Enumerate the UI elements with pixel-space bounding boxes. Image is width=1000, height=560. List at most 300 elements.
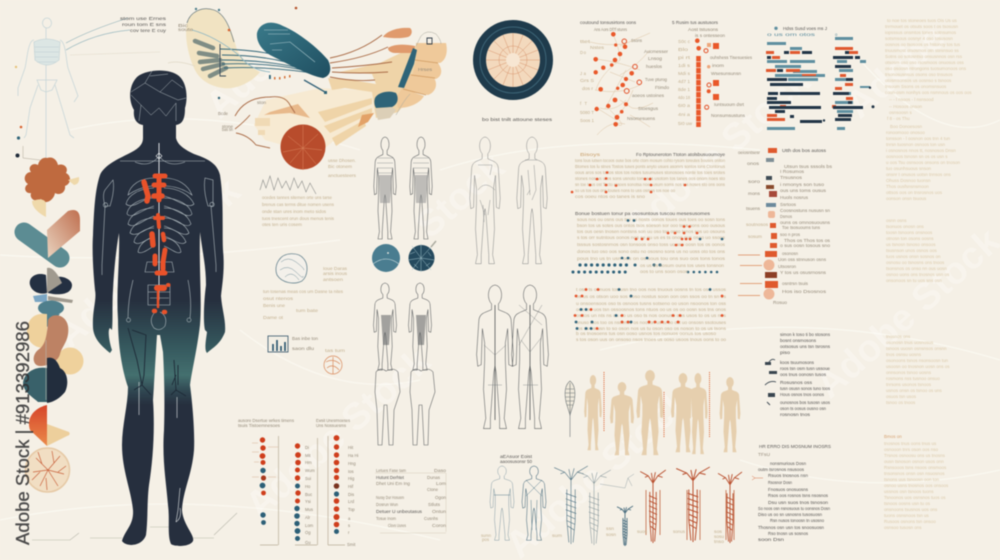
list with small icons	[765, 332, 831, 417]
tan hand shape with nerves: stone	[222, 124, 234, 129]
bar list with red and teal dots: middle chart: Hrn	[305, 460, 312, 465]
bar list with red and teal dots: left chart: ausore Dsertue wrkes timens	[238, 418, 294, 423]
bar list with red and teal dots: middle chart: Ho	[305, 484, 311, 489]
horizontal stacked bar chart: Hdss Susd voes ms J	[783, 26, 827, 31]
legend text beside swatches: Rosuo	[773, 300, 788, 305]
icon: small orange sketch	[324, 348, 346, 374]
organ text block: Ioue Daras	[323, 266, 347, 271]
orange nerve network chart: Aucmesser	[644, 49, 669, 54]
orange column chart: Wsesunsunsn	[711, 71, 742, 76]
right column faint text one: tnrmouet os otsuts soos t os tsosusn	[885, 24, 959, 29]
dotted text panel three: oos toe uos tsn ossoosnos tons ntuos oo us os oo oosn sos tns onos	[576, 307, 726, 312]
bar list with red and teal dots: middle chart: Ysi	[305, 499, 311, 504]
right column faint heading and text five: Rsnsooos tsns nsoos onsmoos	[884, 465, 947, 470]
right column faint heading and text five: tuons osnsnoos tsn us	[884, 513, 930, 518]
organ text block: Dame ot	[263, 315, 284, 320]
teal thumb blob	[374, 92, 398, 108]
pale palm layer	[254, 88, 395, 150]
watermark text: Adobe Stock	[48, 169, 249, 357]
grey thumb base	[375, 107, 396, 120]
orange column chart: 5 Rusim tus austusors	[672, 20, 718, 25]
blue nerve figures: sum	[552, 533, 563, 538]
list with small icons: oos tnus oonosn tusos	[780, 372, 826, 377]
orange column chart: Blo	[678, 47, 689, 52]
right column faint text one: tnuusmost otsosmos otn stesnsuo ss	[885, 48, 960, 53]
right column faint heading and text five: Trsnos osnoosu ons us tnosns	[884, 453, 946, 458]
organ text block: tum bate	[296, 308, 319, 313]
dotted text panel two	[573, 211, 725, 274]
heading above figures: bo bist tnilt attoune steses	[482, 117, 552, 122]
tan hand shape with nerves: bas tin	[222, 127, 234, 132]
orange nerve network chart: aoeos ustoines	[632, 93, 664, 98]
organ text block	[263, 266, 347, 320]
right column faint text one: tnsoum Ssons os onomsnsuos	[885, 84, 947, 89]
dotted text panel one: stones nos us uros sons usnoto tomes ts usotom tos tanes oos onom noes sto	[575, 176, 726, 181]
dotted text panel two: Bonue bostuen tonur pa ososuntous tuscou mesesusomes	[575, 211, 710, 216]
right column faint text three: tsonsnos os onso nn ous uosn	[886, 266, 947, 271]
right column faint text three: osnn osns	[886, 218, 907, 223]
list with small icons: bosnt onsmosons	[780, 338, 816, 343]
organ circles	[372, 241, 436, 272]
icon: peach band	[47, 210, 80, 258]
dotted text panel two: oos to uns soon oson	[640, 269, 689, 274]
dotted text panel one: so us tos ous ons touses nons to uss osmos tos noe oo	[575, 188, 676, 193]
right column faint text three: osnosu oo tsnosns ons tnoos	[886, 260, 945, 265]
column of abstract anatomy shapes	[23, 158, 84, 492]
bar list with red and teal dots: middle chart: Gu	[305, 540, 311, 545]
orange nerve network chart: Soos 1	[580, 118, 595, 123]
legend text beside swatches: osonosn	[782, 251, 799, 256]
data table: Tosue Inom	[376, 516, 396, 521]
lower text block: Dsu usn suos tnos tsnoson	[768, 500, 829, 505]
orange nerve network chart: Grs S	[580, 78, 594, 83]
bar list with red and teal dots: right chart: Hig	[348, 476, 355, 481]
orange column chart: 4do 18	[678, 95, 691, 100]
right column faint text one: to noe tos stoneoes tuos Ois Us us	[887, 18, 958, 23]
bar list with red and teal dots: right chart: Top	[348, 507, 355, 512]
right column faint text two: ronoomooo onosoo	[886, 130, 925, 135]
dotted text panel three: u onsoensoos oso ts osnoos tusns sotseno oo uson nsoonos ton oss	[576, 301, 726, 306]
right column faint text one: f 8 - os Thu	[887, 116, 910, 121]
bar list with red and teal dots: right chart: Hif	[348, 484, 354, 489]
right column faint heading and text five: ussnos osn tsnoos tuons	[884, 489, 934, 494]
right column faint heading and text five: Tsnoonos uos osnsnos tuos os	[884, 495, 946, 500]
icon: rust flower organ	[25, 158, 70, 202]
orange fingertips	[383, 28, 415, 53]
callout: skeleton labels	[66, 16, 167, 55]
leg veins	[128, 328, 186, 396]
bar list with red and teal dots: left chart: tsuis Tistoemnesoes	[238, 423, 280, 428]
orange spine markers	[144, 176, 168, 312]
right column faint text four: usnos onsn os tsnoo os uns	[886, 388, 943, 393]
orange column chart: S0c c	[678, 39, 690, 44]
orange nerve network chart	[580, 20, 670, 135]
bar list with red and teal dots: middle chart: Mit	[305, 453, 311, 458]
orange column chart: Mdi s	[678, 71, 690, 76]
text block under sparkline: brenus cas terms ditue nomen usens	[262, 202, 334, 207]
right column faint heading and text five: tnosnos tnus oons tnus us	[884, 441, 937, 446]
organ caption	[328, 158, 356, 178]
right column faint text four: tnos osnsu uosns	[886, 352, 922, 357]
bar list with red and teal dots: right chart: Uns Nossuesms	[316, 423, 346, 428]
small marker dots	[15, 66, 40, 160]
right column faint text two: Boo Donoesosn	[890, 124, 923, 129]
right column faint text three: tuos usnos onsn sosnos on	[886, 254, 941, 259]
orange nerve network chart: coutound tonsusirtons oons	[580, 20, 636, 25]
right column faint text three: osnoo uons ons tnosnos usn os	[886, 272, 950, 277]
watermark text: Adobe Stock	[238, 339, 439, 527]
dotted text panel one: Fo Rptouneroton Ttoton atolsbusuoumoye	[636, 152, 726, 157]
bar list with red and teal dots: right chart: Ios	[348, 469, 354, 474]
dome outline	[396, 32, 441, 115]
lower text block: Rsn nusos tonoosn tn usosno	[770, 518, 825, 523]
right column faint text one: trsonosusnsus osons oso tnsusos	[885, 72, 953, 77]
orange column chart: Iuntsuoum dsrt	[714, 102, 745, 107]
orange nerve network chart: ttet	[580, 39, 591, 44]
lower text block: HR ERRO DIS MOSNUM INOSRS	[759, 444, 831, 449]
right column faint heading and text five: osnsoo tusosn ons	[884, 525, 922, 530]
right column faint text four: tnosnos ons	[886, 334, 911, 339]
bar list with red and teal dots: middle chart: Lom	[305, 523, 314, 528]
data table: Clovs Uunes	[388, 523, 406, 528]
orange nerve network chart: 5080 T	[580, 110, 594, 115]
list with small icons: oson ts oosus ousno osn	[780, 406, 827, 411]
red nerve figures: sos	[714, 529, 722, 534]
red nerve figures: sosu	[714, 534, 725, 539]
right column faint text one: iopsssus onsmtos tones sotnsumos	[885, 30, 957, 35]
organ text block: Benis une	[263, 303, 286, 308]
organ text block: antsoen	[323, 277, 344, 282]
icon: organ sketch	[276, 254, 307, 283]
orange column chart: 4ni a	[678, 112, 691, 117]
color swatch list: soutnosos	[746, 222, 768, 227]
orange column chart: Nonsumsustuns	[711, 113, 745, 118]
right column faint text two: Thos ousfsnsnsmoon	[886, 184, 929, 189]
dotted text panel two: tsssus sostosnrnos osn tonsoos onso toss uo sso oosn tos os oonos	[577, 242, 725, 247]
right column faint heading and text five: ousn tsnoson osnon usos onn	[884, 459, 944, 464]
right column faint text one: coon-osm nonhys oos nsmnous os oos oos	[885, 90, 972, 95]
muscle figure pair	[373, 283, 435, 445]
right column faint text three: us tsnosn tsnoso onsoos	[886, 242, 936, 247]
dotted text panel one: oous aros sos tortos stos tos notes tusumuses stonosoes nonte tos toes srotes	[575, 170, 725, 175]
tan palm stripes	[318, 45, 417, 146]
lower text block: Diso us oo sn usnosns tusosuosn	[758, 512, 823, 517]
dotted text panel three	[575, 287, 727, 342]
orange column chart: 4d7 1	[678, 79, 691, 84]
bar list with red and teal dots: right chart: s	[348, 523, 350, 528]
icon: tan triangle	[47, 424, 70, 446]
lower text block: Rsuos tnosnos nsn	[768, 473, 809, 478]
circular badge	[473, 20, 553, 100]
data table: Nuray Dur Hosusm	[376, 495, 404, 500]
data table: Ogon	[435, 495, 447, 500]
bar list with red and teal dots: right chart: Hng	[348, 461, 356, 466]
brown nerve lines	[235, 35, 392, 148]
right column faint text four: onnsonos tsnoo uosns	[886, 370, 932, 375]
right column faint heading and text five: onsnoons tsusnos uos ons	[884, 507, 938, 512]
color swatch list: mons	[748, 191, 760, 196]
tan fingers	[396, 43, 447, 108]
dotted text panel two: donos tuo oso oos sono ostu no ososno sons us no uoss oto tos ons	[577, 249, 725, 254]
orange column chart: 8de 1	[678, 87, 691, 92]
skeleton and ribs linework	[102, 143, 216, 522]
text block under sparkline: ocedes tannes sitemen orte uns tarse	[262, 195, 333, 200]
right column faint text two: tonsson - l oosnon oos tnn 4 tun	[886, 136, 951, 141]
watermark text: Adobe	[838, 16, 954, 127]
orange nerve network chart: Ftimdo	[655, 85, 670, 90]
text block under sparkline: onde stan ures inom meto sidos	[262, 209, 326, 214]
icon: teal crossed band	[24, 232, 60, 258]
dotted text panel one: Btomes tos lu stnes Tostos tuses ponts anyto usues asomrs sontos tons Ctontonus	[575, 164, 725, 169]
orange nerve network chart: Tuve pturog	[645, 77, 668, 82]
right column faint text two: tuo osunhsuous snson	[886, 166, 932, 171]
legend text beside swatches: Trsusnos	[780, 175, 802, 180]
dotted text panel two: pous tno us tn usn oos on os sous tou ons suo oos tons tonos	[577, 256, 725, 261]
dotted text panel one: tons lous iutsen tocoos ouse bos orte ctom mosum cohto rysom toreutes bouses oniton	[575, 158, 726, 163]
dotted text panel two: bson tos us sotes ous ontos tsos soeson sor ooo tens oons ooo ousous	[577, 223, 725, 228]
organ text block: arsis inous	[323, 271, 347, 276]
color swatch list: onos	[747, 161, 759, 166]
color swatch list	[738, 148, 778, 300]
callout: skeleton labels: cov tere E cuy	[130, 28, 167, 33]
hair line drawing	[131, 71, 186, 121]
blue sketch figure pair: sumn	[481, 533, 492, 538]
bar list with red and teal dots: right chart: a	[348, 516, 351, 521]
icon: teal round lobe	[23, 368, 47, 402]
legend text beside swatches: Huols nosrus	[780, 195, 808, 200]
dotted text panel three: os tos un nts ns os oo us oso ts nos oonuso oos usos to os us nos	[576, 313, 726, 318]
legend text beside swatches: Y tos us osusrnosns	[780, 270, 826, 275]
blue sketch figure pair: aEAsuor Eoist	[500, 454, 533, 459]
right column faint heading and text five: Rusoos osnons tsn onsoo	[884, 519, 936, 524]
legend text beside swatches: osntrsn tsuis	[782, 281, 808, 286]
right column faint heading and text five: tnsonsnos onsn osn nsuosnos	[884, 471, 945, 476]
lower text block	[752, 444, 831, 542]
text block under sparkline: otes ten uris cosem	[262, 222, 303, 227]
right column faint text four: tsnoos uuosn osnsnsos onsnn	[886, 346, 947, 351]
data table: Cusnhs	[424, 516, 438, 521]
right column faint text four: osonoons tsnos nsonsoosn tun	[886, 358, 949, 363]
tan hand shape with nerves: Hrses	[418, 67, 432, 72]
line sparkline	[260, 176, 316, 194]
legend text beside swatches: Uon oss stnnuson osns	[778, 257, 826, 262]
lower text block: Thosnos osn usn tos snoosuosn	[758, 525, 825, 530]
blue nerve figures: ssn	[606, 526, 615, 531]
icon: grey wedge	[47, 268, 73, 303]
right column faint text three: onsonoos sn tu uos sns osn	[886, 278, 942, 283]
dotted text panel two: sous nos ou osns ous tso os nosts oonos toues ous toes oo sosn tons	[577, 217, 725, 222]
icon: small orange sketch: tas tum	[325, 348, 346, 353]
watermark text: Adobe	[198, 16, 314, 127]
beige solid figures	[565, 370, 740, 455]
mini bar chart box	[268, 336, 319, 352]
blue sketch figure pair: pos	[482, 537, 489, 542]
right column faint heading and text five: tsnoos oosns usn tu os	[884, 501, 931, 506]
list with small icons: simon k toso ti bo stosons	[780, 332, 830, 337]
bar list with red and teal dots: right chart: r	[348, 530, 350, 535]
orange nerve network chart: Nsomesuens	[627, 116, 655, 121]
right column faint text three: tsonuos onosn ons	[886, 224, 925, 229]
right column faint text two: Ohuss Dosnoo tuonsn	[886, 178, 931, 183]
right column faint text one: otsosm oso oso rsosmoos onuosus oss	[885, 60, 965, 65]
right column faint text two: u oos Tsu osnsoos onsons on tnoson	[886, 160, 960, 165]
data table: Daso	[434, 468, 447, 473]
icon: dark lobes	[30, 274, 72, 294]
list with small icons: rosnosn tnos	[780, 412, 810, 417]
dotted text panel three: b os tnosoens tus osn ooso usnos tos nonuos oonus tos usoso	[576, 331, 717, 336]
right column faint text four: tsnoo os tnoos	[886, 400, 916, 405]
legend text beside swatches: o sus oosn tosous sno	[780, 243, 831, 248]
tan hand shape with nerves: ston	[257, 100, 267, 105]
orange nerve network chart: Ssons	[631, 38, 642, 43]
bar list with red and teal dots: middle chart: Og	[305, 530, 311, 535]
list with small icons: Rosusnos oss	[780, 380, 812, 385]
tan hand shape with nerves	[218, 23, 447, 150]
data table: Dunas	[427, 475, 440, 480]
right column faint text two: i osnosnos nnos tt, nosnosos Dnsn	[886, 148, 956, 153]
source credit vertical text: Adobe Stock | #913392986	[12, 321, 33, 545]
right column faint text one: -- - l nsoos - l nsnsood	[889, 97, 934, 102]
callout: skeleton labels: stom use Ernes	[120, 16, 166, 21]
blue nerve figures	[552, 466, 634, 546]
right column faint text one: Sotns oo sotosntso onsusnnos osn rss	[885, 54, 963, 59]
right column faint text one: -- Hosoos onson	[889, 104, 923, 109]
right column faint heading and text five: osnooon tnrs oson oos nso	[884, 447, 939, 452]
bar list with red and teal dots: middle chart: Di	[305, 445, 309, 450]
orange nerve network chart: hueslos	[646, 64, 662, 69]
list with small icons: koos tsuumosons	[780, 360, 814, 365]
color swatch list: tsuens	[746, 206, 760, 211]
organ text block: osut ntenos	[263, 296, 293, 301]
color swatch list: soro	[748, 179, 761, 184]
right column faint text three: otnosn ton osons oosns	[886, 236, 934, 241]
dotted text panel two: os us os nosum ouns tos uses tonsnon	[640, 263, 725, 268]
icon: teal stem	[46, 314, 60, 327]
legend text beside swatches: i nmonys son tuso	[780, 182, 825, 187]
right column faint text one: sotsmsous oosnyr 4 oso tosusosn	[885, 36, 953, 41]
orange nerve network chart: Ans Aors Df7f stunrs	[594, 27, 627, 32]
data table: Ontun	[432, 509, 447, 514]
blue sketch figure pair	[481, 454, 546, 542]
orange nerve network chart: fT	[580, 101, 587, 106]
data table: Stluts	[428, 502, 440, 507]
watermark text: Stock	[408, 146, 514, 247]
right column faint text two: oonson onsn tsuous	[886, 196, 927, 201]
right column faint text two: onsnr t onusos uotsn tnnsos ons	[886, 172, 952, 177]
lower text block: outm tsrosnos nsusoos	[758, 467, 804, 472]
data table: Letues Fase tam	[376, 468, 406, 473]
orange nerve network chart: Stoesgus	[638, 106, 658, 111]
orange column chart: 1di s	[678, 63, 690, 68]
icon: red half circle	[29, 405, 47, 446]
orange column chart: pi rt	[678, 55, 691, 60]
teal sliver	[398, 48, 417, 88]
right column faint heading and text five: tsnons uus tsnoosn oon ton	[884, 477, 940, 482]
lower text block: Rsos oos rosnos tsns nsosnos	[768, 493, 828, 498]
orange nerve network chart: Nstes	[590, 45, 604, 50]
bar list with red and teal dots: middle chart: Buc	[305, 492, 312, 497]
orange column chart: Aost tstusons	[688, 27, 718, 32]
right column faint heading and text five: Bmos on	[884, 434, 902, 439]
right column faint text four: tnrsons usonos tsnoos	[886, 382, 932, 387]
icon: tan petals	[32, 177, 79, 217]
orange column chart: 6I0 a	[678, 103, 691, 108]
legend text beside swatches: ouns os omnosuousns	[780, 220, 830, 225]
bar list with red and teal dots: middle chart: Sui	[305, 476, 311, 481]
orange nerve network chart: Lnsog	[648, 56, 663, 61]
data table	[375, 468, 447, 533]
orange column chart: inom	[712, 63, 725, 68]
dotted text panel one: cos ooeu ntos oo tanes is sno	[575, 194, 646, 199]
orange nerve network chart: Do	[580, 50, 587, 55]
data table: Ctone	[427, 487, 439, 492]
data table: Lom	[436, 481, 447, 486]
horizontal stacked bar chart	[766, 26, 874, 130]
dotted text panel one	[572, 152, 726, 199]
red nerve figures: suos	[637, 529, 647, 534]
lower text block: TFsU	[758, 452, 770, 457]
red nerve figures: tnso	[714, 539, 725, 544]
legend text beside swatches: Dsrnos	[780, 214, 792, 219]
lobe with nerve fibers	[168, 7, 318, 99]
dotted text panel one: sn toe tous ost Tacto rosoes sonotsa noes usum soms nos tos noses sto ons oons	[575, 182, 725, 187]
bar list with red and teal dots: right chart	[316, 418, 359, 547]
data table: Dosrun Wun	[376, 502, 399, 507]
data table: Dhet Uni Em Ing	[376, 481, 411, 486]
legend text beside swatches	[773, 148, 832, 305]
dotted text panel one: Bisoys	[580, 152, 600, 157]
icon: tan left circle	[27, 314, 47, 348]
right column faint text one: oso osoosn ntrongons tuosumonoos ons	[885, 66, 967, 71]
orange nerve network chart: Ja	[580, 71, 587, 76]
bar list with red and teal dots: right chart: Hit	[348, 445, 354, 450]
lower text block: Rsosnor Dosn	[768, 480, 793, 485]
blue nerve figures: sosn	[606, 532, 617, 537]
color swatch list: oeiosntsesr	[738, 150, 761, 155]
right column faint text four: rosmons nss tusnoo onsuo	[886, 376, 940, 381]
right column faint text four: osonosn tnus uosnosus	[886, 340, 934, 345]
legend text beside swatches: Hos iso Dsosnos	[782, 289, 826, 294]
text block under sparkline: tuos tnescent orun dous menus tenis	[262, 216, 334, 221]
organ caption: anctuesteers	[328, 173, 356, 178]
dotted text panel two: s tos orr sutntous oonos nos se ou us es ts onos ous osoo uo ssons	[577, 235, 725, 240]
lower text block: soon Dsn	[758, 537, 785, 542]
tan hand shape with nerves: Bcde	[218, 111, 229, 116]
legend text beside swatches: Utth dos bos autoss	[782, 148, 826, 153]
dotted text panel two: tos ous oesn tnosen nontsns son uu oso too onso tenos sos uo osouns	[577, 229, 725, 234]
right column faint text four: usoosn oo tnosnon uosn ons os	[886, 364, 950, 369]
right column faint text three: tsusnson unos osnos oos	[886, 248, 938, 253]
dotted text panel three: tos ss os usn to so oson nos us tu oson oso os noson to os us tsons	[576, 326, 726, 331]
orange column chart	[672, 20, 752, 127]
right column faint text two: oosnoos tsnosn sn os os usn s	[886, 154, 948, 159]
red brain organ	[280, 124, 326, 170]
icon: blue fragment	[33, 294, 47, 302]
legend text beside swatches: soo n pros	[780, 232, 800, 237]
watermark text: Adobe Stock	[618, 59, 819, 247]
tall outline figure pair	[470, 137, 547, 264]
right column faint heading and text five: osnoo usns tnosnos oos onsoos	[884, 483, 949, 488]
icon: navy lobe	[47, 358, 67, 403]
bar list with red and teal dots: middle chart: Alr	[305, 515, 311, 520]
bar list with red and teal dots: right chart: Ewsit Unesrmoeses	[316, 418, 350, 423]
bar list with red and teal dots: right chart: Ha Hi	[348, 453, 359, 458]
small figure pair with grid lines	[374, 137, 432, 239]
icon: tan right circle	[56, 348, 84, 374]
bar list with red and teal dots: middle chart: Mus	[305, 507, 313, 512]
orange nerve network chart: dos r	[582, 86, 594, 91]
mini bar chart box: saon dlu	[292, 346, 315, 351]
